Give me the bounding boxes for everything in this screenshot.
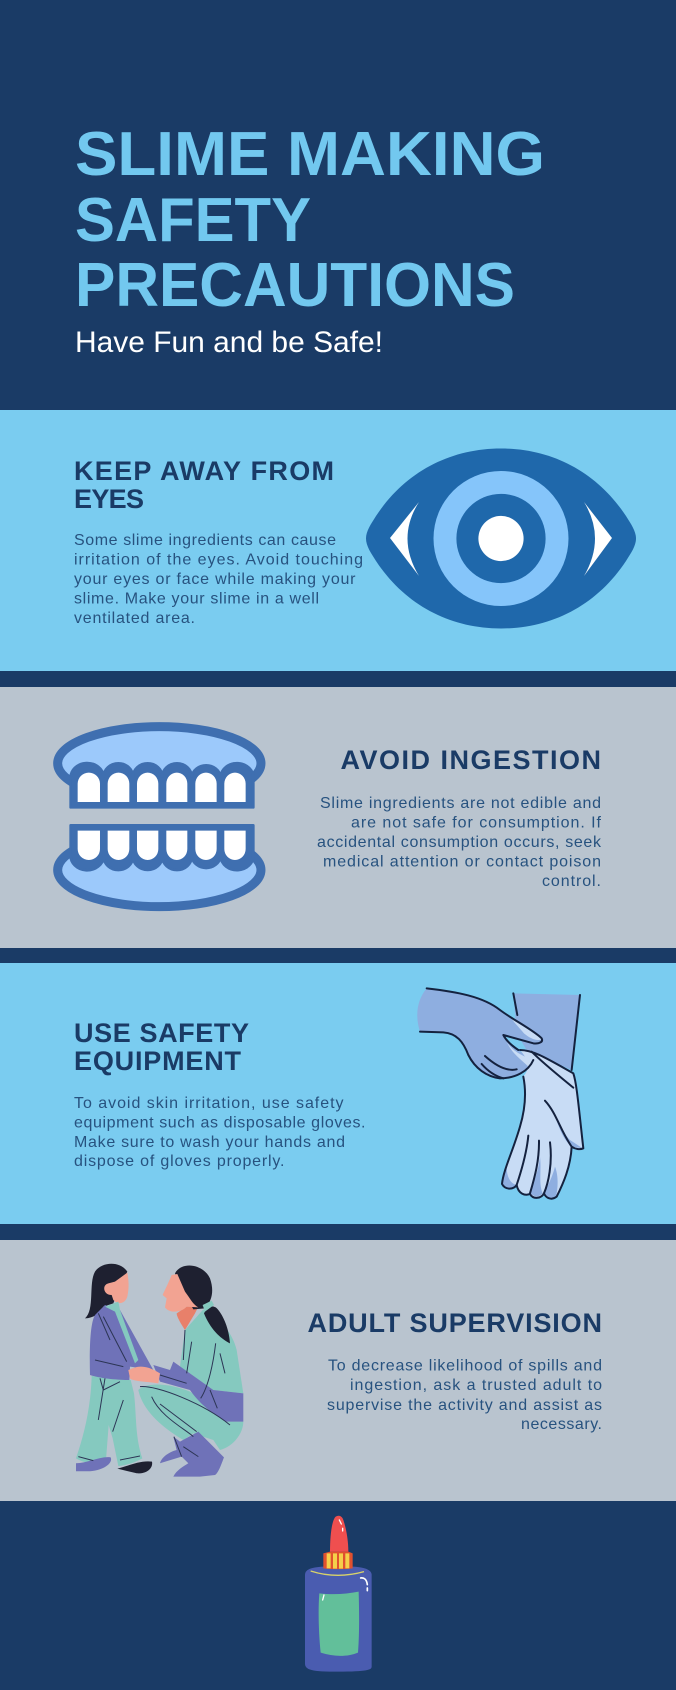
- heading: use safety equipment: USE SAFETY: [74, 1018, 249, 1048]
- panel: avoid ingestion: [0, 687, 676, 948]
- heading: keep away from eyes: [74, 456, 334, 514]
- panel: adult supervision: [0, 1240, 676, 1501]
- title: [75, 120, 545, 320]
- text block: safety equipment: [74, 1095, 366, 1170]
- text block: ingestion: control.: [542, 873, 601, 890]
- heading: avoid ingestion: AVOID INGESTION: [340, 745, 601, 775]
- icon: eye: [366, 448, 636, 628]
- text block: eyes: irritation of the eyes. Avoid touching: [74, 552, 363, 568]
- text block: safety equipment: To avoid skin irritation, use safety: [74, 1095, 344, 1112]
- panel: use safety equipment: [0, 963, 676, 1224]
- text block: eyes: slime. Make your slime in a well: [74, 590, 319, 608]
- text block: safety equipment: Make sure to wash your hands and: [74, 1134, 345, 1151]
- text block: ingestion: Slime ingredients are not edible and: [320, 795, 601, 812]
- subtitle: Have Fun and be Safe!: [75, 326, 383, 359]
- heading: keep away from eyes: KEEP AWAY FROM: [74, 456, 334, 486]
- text block: ingestion: are not safe for consumption. If: [351, 814, 602, 832]
- text block: eyes: Some slime ingredients can cause: [74, 532, 336, 549]
- text block: ingestion: accidental consumption occurs, seek: [317, 834, 602, 851]
- text block: supervision: To decrease likelihood of spills and: [328, 1358, 602, 1374]
- text block: supervision: ingestion, ask a trusted adult to: [350, 1377, 602, 1394]
- panel: keep away from eyes: [0, 410, 676, 671]
- text block: ingestion: [317, 795, 602, 890]
- icon: teeth: [58, 727, 261, 907]
- child: [76, 1264, 153, 1473]
- text block: supervision: necessary.: [521, 1416, 602, 1433]
- icon: adult and child: [76, 1264, 243, 1477]
- heading: keep away from eyes: EYES: [74, 484, 144, 514]
- title: SLIME MAKING: [75, 120, 545, 189]
- text block: eyes: [74, 532, 363, 627]
- text block: safety equipment: equipment such as disposable gloves.: [74, 1114, 366, 1132]
- text block: supervision: supervise the activity and assist as: [327, 1397, 602, 1414]
- text block: eyes: ventilated area.: [74, 610, 195, 627]
- text block: eyes: your eyes or face while making your: [74, 571, 356, 588]
- title: PRECAUTIONS: [75, 251, 515, 320]
- heading: adult supervision: ADULT SUPERVISION: [308, 1308, 602, 1338]
- title: SAFETY: [75, 186, 311, 255]
- icon: glue bottle: [305, 1516, 372, 1672]
- heading: use safety equipment: EQUIPMENT: [74, 1046, 242, 1076]
- text block: supervision: [327, 1358, 602, 1433]
- heading: use safety equipment: [74, 1018, 249, 1076]
- adult: [128, 1265, 243, 1477]
- icon: gloved hands: [417, 988, 583, 1199]
- text block: safety equipment: dispose of gloves properly.: [74, 1153, 284, 1170]
- text block: ingestion: medical attention or contact poison: [323, 854, 601, 870]
